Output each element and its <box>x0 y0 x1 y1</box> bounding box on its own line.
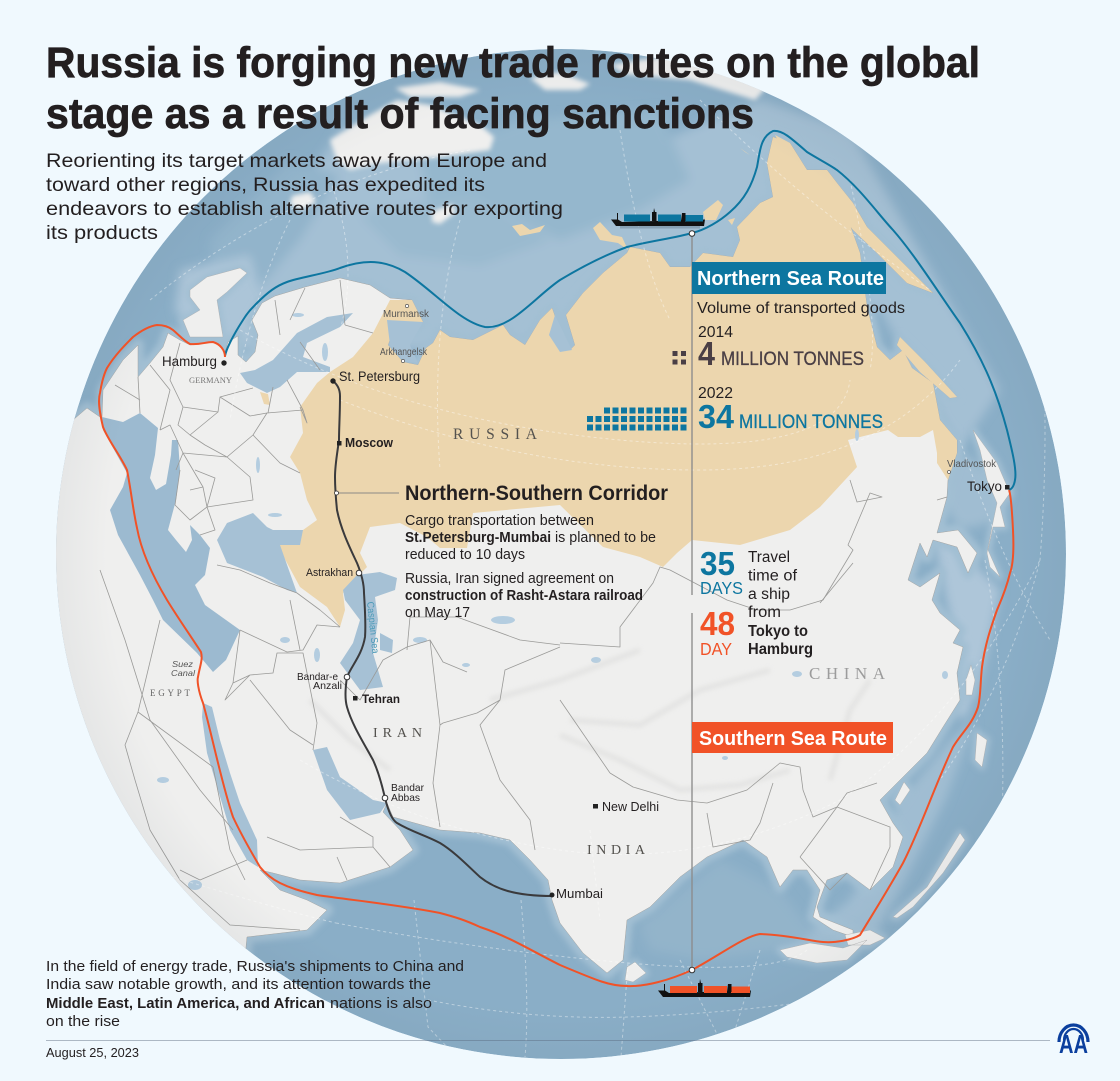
bandar-e anzali: Anzali <box>313 680 342 692</box>
tokyo: Tokyo <box>967 479 1002 494</box>
country label iran: IRAN <box>373 726 422 741</box>
date: August 25, 2023 <box>46 1045 139 1060</box>
country label russia: RUSSIA <box>453 426 538 443</box>
2022 unit squares <box>587 408 686 430</box>
2014 unit squares <box>672 351 686 364</box>
bottom note: on the rise <box>46 1013 120 1030</box>
panel: northern-southern corridor <box>405 482 668 621</box>
travel time caption <box>748 549 813 658</box>
corridor cargo text <box>405 513 656 563</box>
northern sea route line <box>225 131 1015 490</box>
bandar-e anzali: Bandar-e <box>297 671 338 683</box>
2022 value: 34 <box>698 398 735 435</box>
panel: northern sea route <box>587 262 905 435</box>
travel time caption: Travel <box>748 549 790 566</box>
panel: travel time comparison <box>700 545 813 659</box>
southern sea route line <box>99 325 1013 986</box>
country label china: CHINA <box>809 664 886 683</box>
relief shading <box>310 650 870 790</box>
travel time caption: a ship <box>748 586 790 603</box>
caspian sea label: Caspian Sea <box>364 601 380 654</box>
route label <box>692 262 886 294</box>
title: Russia is forging new trade routes on the global <box>46 39 980 87</box>
globe edge shading <box>56 59 942 948</box>
arkhangelsk: Arkhangelsk <box>380 347 428 358</box>
bandar-e anzali <box>297 671 350 692</box>
bottom note: In the field of energy trade, Russia's shipments to China and <box>46 958 464 975</box>
bottom note <box>46 958 464 1030</box>
2014 value: 4 <box>698 335 716 372</box>
suez canal: Canal <box>171 668 196 678</box>
murmansk: Murmansk <box>383 309 430 320</box>
travel time caption: from <box>748 604 781 621</box>
egypt label: EGYPT <box>150 688 190 698</box>
continental shelf halo <box>56 308 982 980</box>
icon: ship red <box>658 979 751 997</box>
bandar abbas: Bandar <box>391 782 424 794</box>
arctic ice lands <box>290 50 790 224</box>
lakes <box>157 313 948 890</box>
35 days: 35 <box>700 545 735 582</box>
2014 value <box>698 324 864 372</box>
russian arctic islands and Kaliningrad <box>260 135 957 405</box>
route label: Northern Sea Route <box>697 268 884 290</box>
arctic shelf waters <box>170 100 1010 960</box>
corridor railroad text: Russia, Iran signed agreement on <box>405 571 614 587</box>
country borders <box>100 280 947 930</box>
astrakhan: Astrakhan <box>306 567 353 579</box>
route marker top <box>689 231 695 236</box>
inland and marginal seas <box>102 313 572 867</box>
bottom note: Middle East, Latin America, and African <box>46 995 325 1012</box>
corridor railroad text <box>405 571 643 621</box>
2022 value <box>698 385 883 435</box>
land masses <box>30 137 977 1010</box>
title <box>46 39 980 138</box>
subtitle <box>46 150 563 244</box>
country label india: INDIA <box>587 843 646 858</box>
hamburg: Hamburg <box>162 353 217 369</box>
russia <box>280 137 957 627</box>
vertical connector line between routes <box>691 234 693 970</box>
southern sea route label: Southern Sea Route <box>699 728 887 750</box>
subtitle: Reorienting its target markets away from Europe and <box>46 150 547 172</box>
volume caption: Volume of transported goods <box>697 300 905 317</box>
35 days: DAYS <box>700 578 743 598</box>
48 day <box>700 605 735 659</box>
islands <box>183 268 1010 982</box>
title: stage as a result of facing sanctions <box>46 90 754 138</box>
2022 value: MILLION TONNES <box>739 412 883 433</box>
corridor cargo text: is planned to be <box>555 530 656 546</box>
48 day: 48 <box>700 605 735 642</box>
corridor railroad text: on May 17 <box>405 605 470 621</box>
2014 value: 2014 <box>698 324 733 341</box>
travel time caption: time of <box>748 568 798 584</box>
northern-southern corridor line <box>333 381 552 896</box>
corridor marker <box>334 491 338 495</box>
travel time caption: Hamburg <box>748 641 813 658</box>
2014 value: MILLION TONNES <box>721 349 864 370</box>
leader line to corridor label <box>337 492 399 494</box>
graticule <box>150 100 1050 1057</box>
st petersburg: St. Petersburg <box>339 369 420 384</box>
subtitle: toward other regions, Russia has expedited its <box>46 174 485 196</box>
corridor cargo text: St.Petersburg-Mumbai <box>405 530 551 546</box>
arkhangelsk <box>380 347 428 363</box>
corridor heading: Northern-Southern Corridor <box>405 482 668 505</box>
logo: AA: AA <box>1059 1029 1088 1059</box>
icon: ship blue <box>611 208 705 228</box>
subtitle: endeavors to establish alternative routes for exporting <box>46 198 563 220</box>
mumbai: Mumbai <box>556 887 603 901</box>
2022 value: 2022 <box>698 385 733 402</box>
moscow: Moscow <box>345 436 393 450</box>
corridor cargo text: reduced to 10 days <box>405 547 525 563</box>
southern sea route label <box>692 722 893 753</box>
city markers and labels <box>150 304 1010 901</box>
suez canal <box>171 659 196 678</box>
germany label: GERMANY <box>189 375 232 385</box>
48 day: DAY <box>700 639 732 659</box>
vladivostok: Vladivostok <box>947 459 997 470</box>
subtitle: its products <box>46 222 158 244</box>
35 days <box>700 545 743 598</box>
footer divider <box>46 1040 1050 1042</box>
bottom note: nations is also <box>330 995 432 1012</box>
travel time caption: Tokyo to <box>748 623 808 640</box>
bottom note: India saw notable growth, and its attention towards the <box>46 976 431 993</box>
new delhi: New Delhi <box>602 800 659 814</box>
bandar abbas: Abbas <box>391 792 420 804</box>
suez canal: Suez <box>172 659 194 669</box>
corridor cargo text: Cargo transportation between <box>405 513 594 529</box>
tehran: Tehran <box>362 692 400 706</box>
corridor railroad text: construction of Rasht-Astara railroad <box>405 588 643 604</box>
route marker bottom <box>689 967 695 973</box>
bandar abbas <box>382 782 424 804</box>
